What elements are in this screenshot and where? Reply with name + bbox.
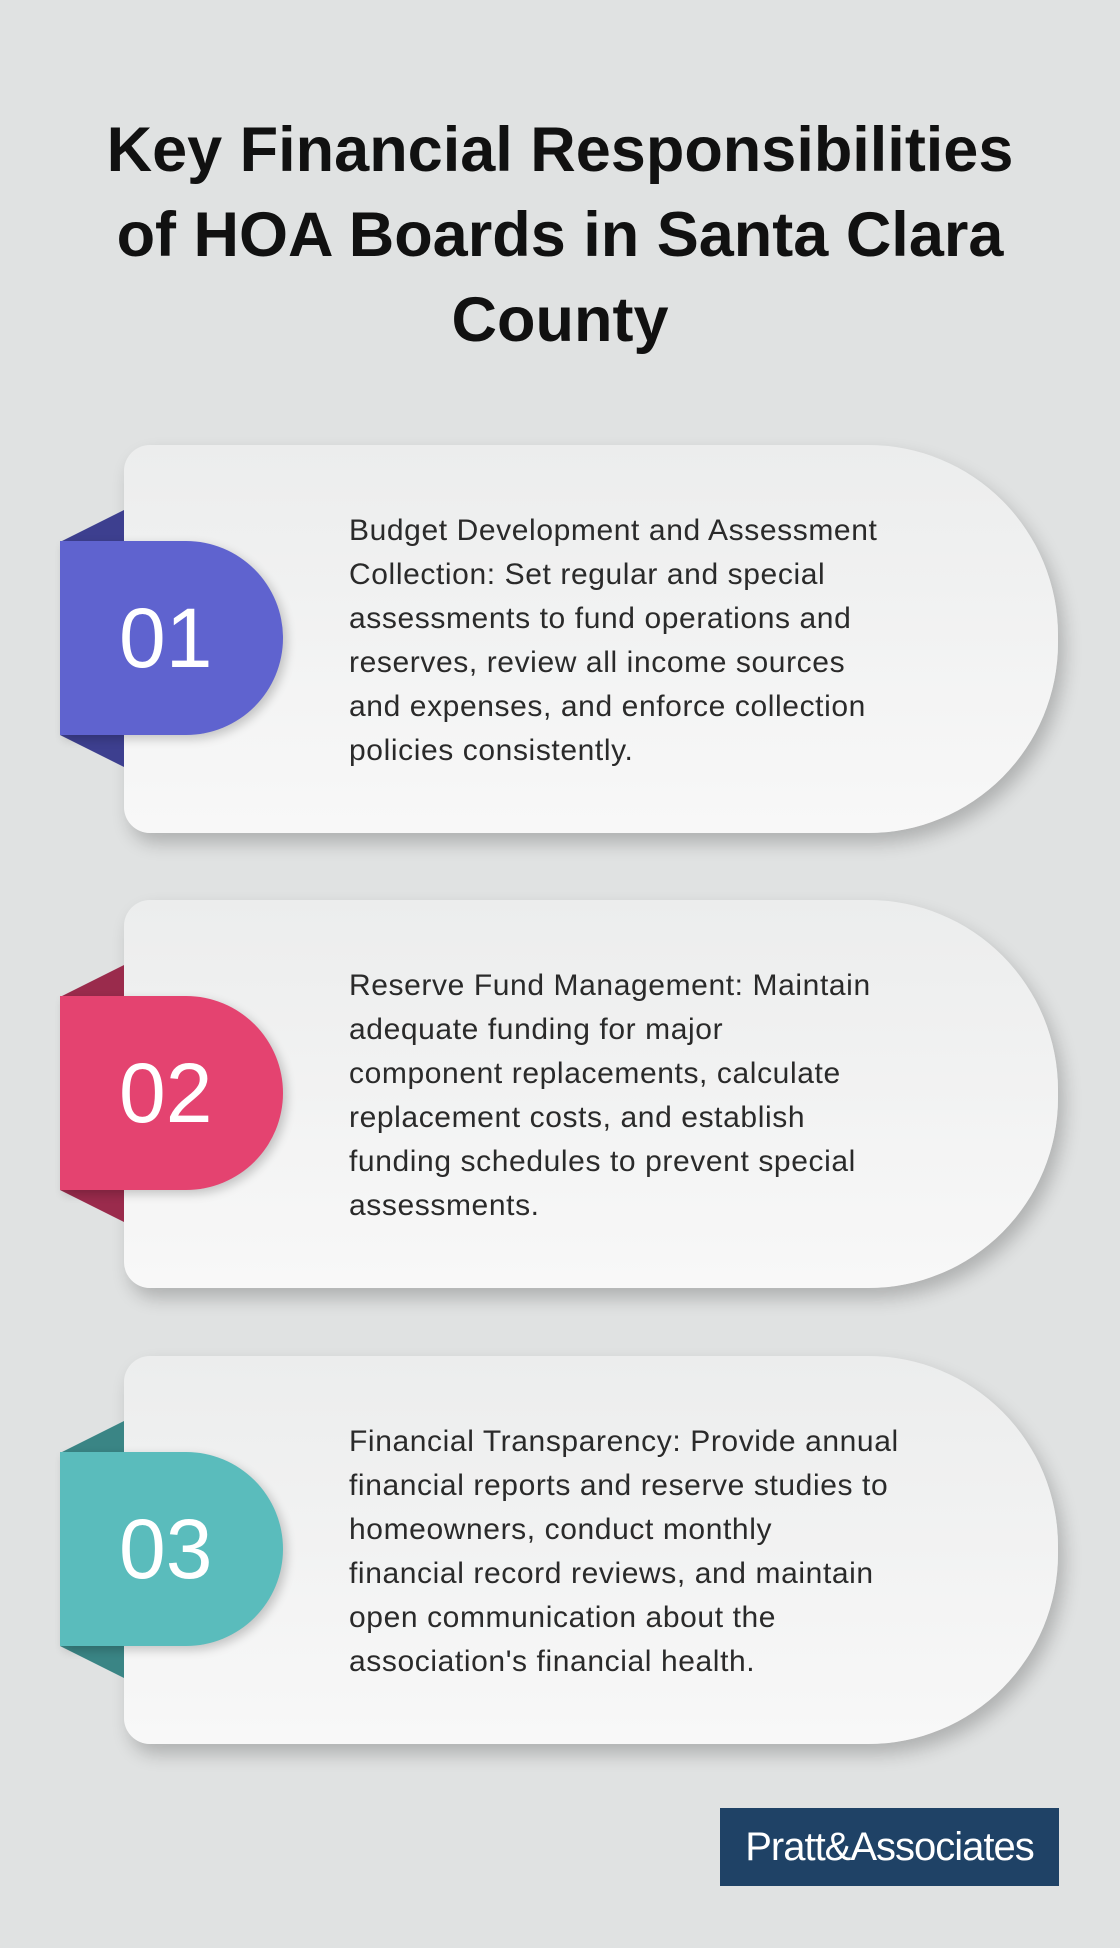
text 01: policies consistently. [349,734,633,767]
fold bottom 01 [60,735,124,767]
text 03: financial record reviews, and maintain [349,1557,874,1590]
text 03: homeowners, conduct monthly [349,1513,772,1546]
fold top 01 [62,510,124,541]
logo [720,1808,1059,1886]
text 02: replacement costs, and establish [349,1101,805,1134]
card 02 [124,900,1058,1288]
fold top 03 [62,1421,124,1452]
text 02: component replacements, calculate [349,1057,841,1090]
title: Key Financial Responsibilities of HOA Boards in Santa Clara County [107,115,1013,355]
text 02: Reserve Fund Management: Maintain [349,969,871,1002]
text 03: Financial Transparency: Provide annual [349,1425,899,1458]
text 02: funding schedules to prevent special [349,1145,856,1178]
text 02 [349,969,871,1222]
text 01: Collection: Set regular and special [349,558,825,591]
tab 02 [60,996,283,1190]
text 01: reserves, review all income sources [349,646,845,679]
fold bottom 02 [60,1190,124,1222]
tab 01: 01 [119,591,212,685]
text 01 [349,514,877,767]
fold top 02 [62,965,124,996]
tab 01 [60,541,283,735]
card 03 [124,1356,1058,1744]
panel: item 01 [60,445,1072,852]
panel: item 02 [60,900,1072,1306]
text 03: open communication about the [349,1601,776,1634]
text 03: financial reports and reserve studies to [349,1469,888,1502]
tab 02: 02 [119,1046,212,1140]
text 01: and expenses, and enforce collection [349,690,866,723]
panel: item 03 [60,1356,1072,1762]
text 03: association's financial health. [349,1645,755,1678]
text 03 [349,1425,899,1678]
tab 03: 03 [119,1502,212,1596]
text 02: assessments. [349,1189,540,1222]
text 01: assessments to fund operations and [349,602,851,635]
fold bottom 03 [60,1646,124,1678]
tab 03 [60,1452,283,1646]
card 01 [124,445,1058,833]
text 02: adequate funding for major [349,1013,723,1046]
logo: Pratt&Associates [745,1825,1034,1869]
text 01: Budget Development and Assessment [349,514,877,547]
